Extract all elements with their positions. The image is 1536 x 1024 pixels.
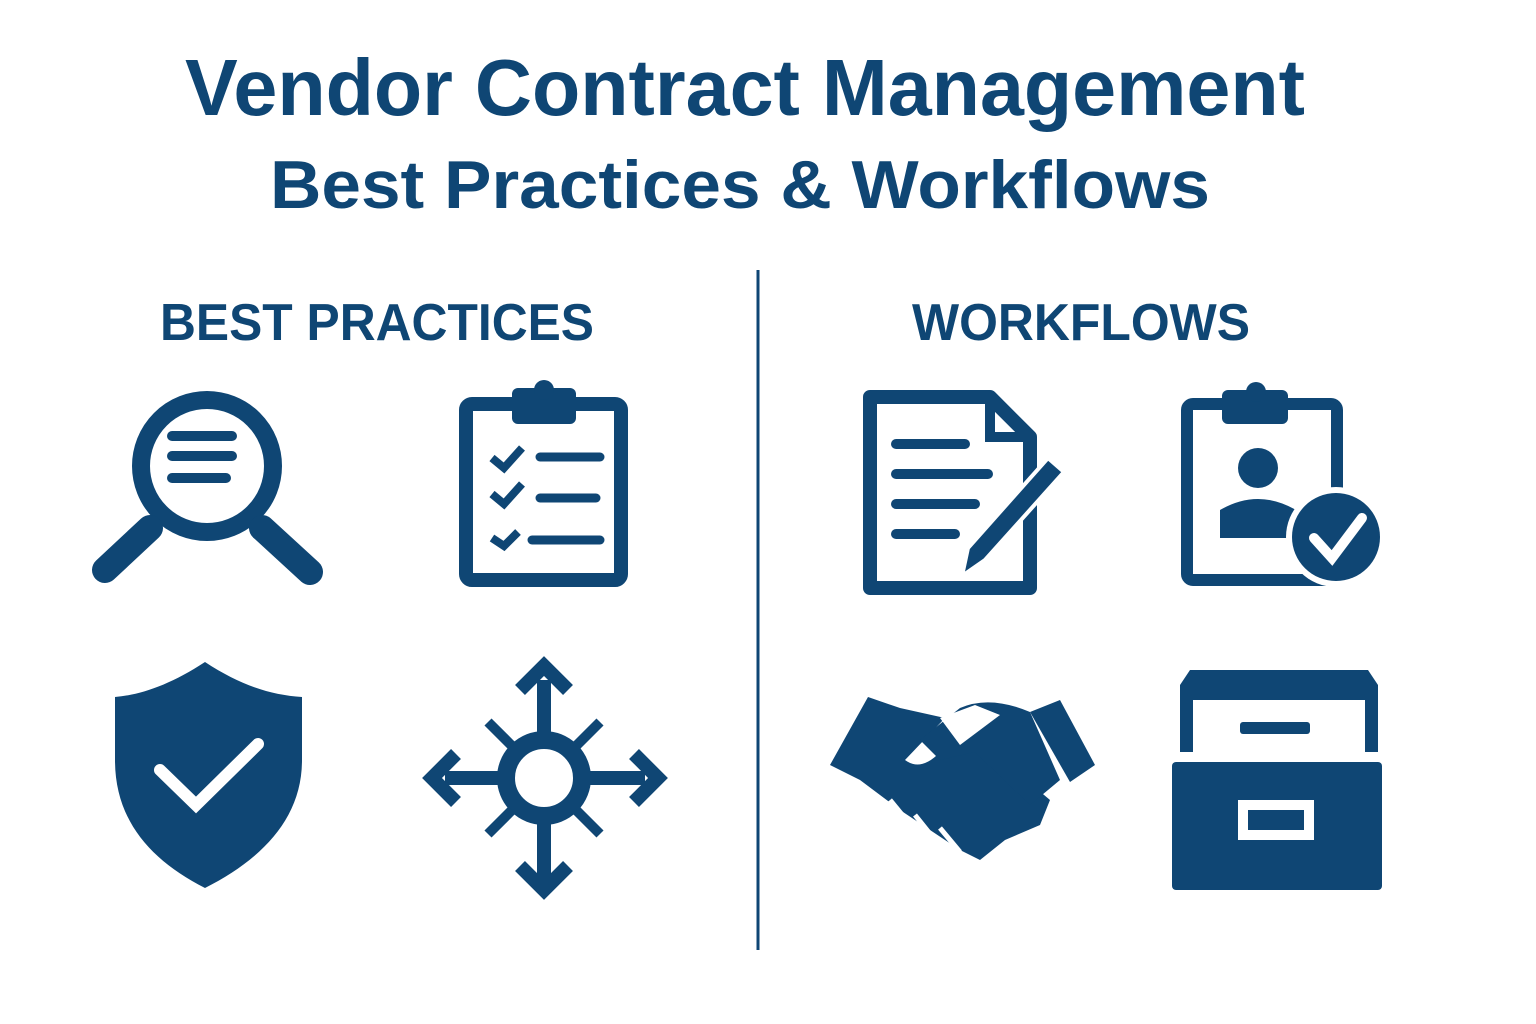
icon: handshake — [830, 697, 1095, 860]
title: Best Practices & Workflows — [270, 147, 1210, 223]
heading: workflows: WORKFLOWS — [912, 294, 1250, 352]
icon: magnifying glass — [105, 400, 310, 572]
divider — [756, 270, 760, 950]
heading: best practices: BEST PRACTICES — [160, 294, 594, 352]
icon: document with pen — [870, 397, 1064, 588]
title: Vendor Contract Management — [185, 43, 1305, 132]
icon: hub arrows — [432, 666, 658, 890]
icon: file box — [1172, 670, 1382, 890]
icon: clipboard with person check — [1187, 382, 1386, 587]
icon: checklist clipboard — [466, 380, 621, 580]
icon: shield — [115, 662, 302, 888]
title — [185, 43, 1305, 223]
